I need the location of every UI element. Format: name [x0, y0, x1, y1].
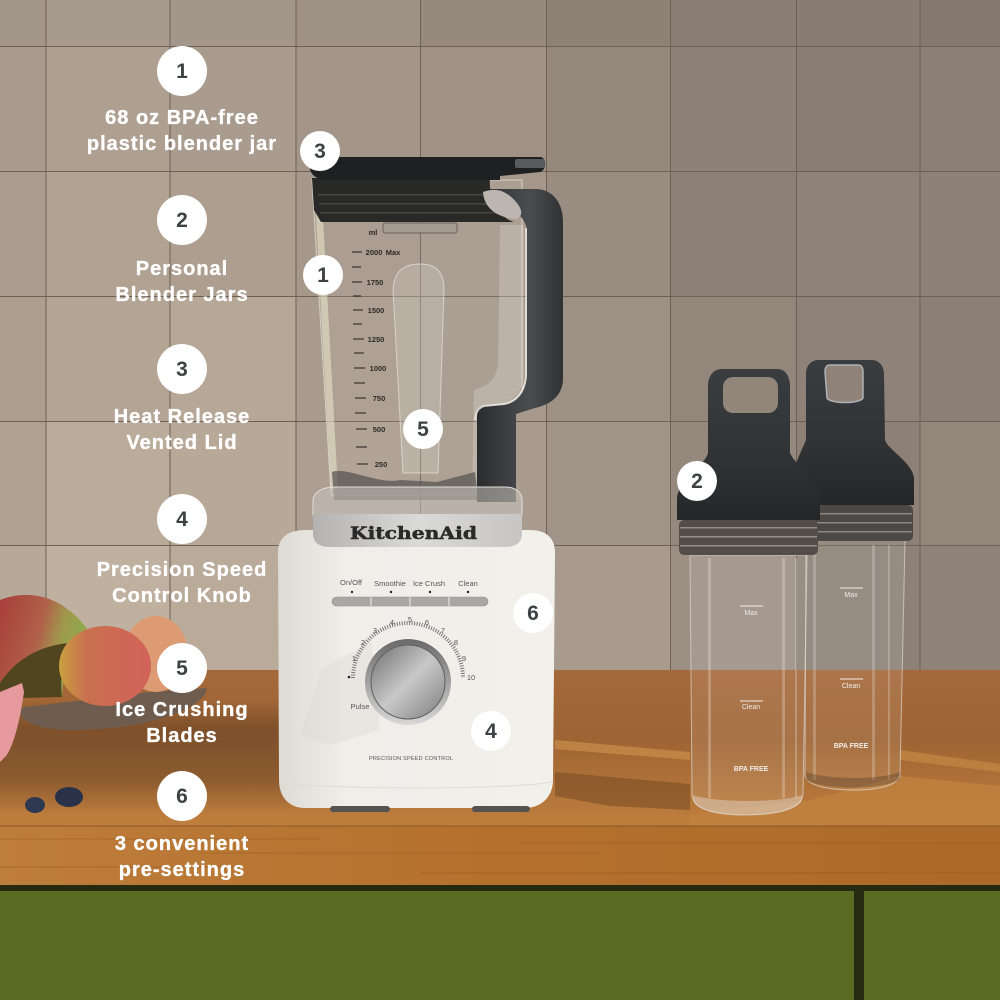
- blueberries: [25, 787, 83, 813]
- preset buttons: Smoothie: [374, 579, 406, 588]
- callout 1: 68 oz jar: plastic blender jar: [87, 133, 277, 155]
- callout 2: personal jars: Blender Jars: [115, 284, 249, 306]
- callout 6: pre-settings: 3 convenient: [115, 833, 249, 855]
- callout 1: 68 oz jar: 68 oz BPA-free: [105, 107, 259, 129]
- fruit plate: [0, 595, 207, 762]
- callout 5: blades: [115, 643, 249, 747]
- jar right inner wall: [472, 225, 524, 495]
- measurement scale: [352, 228, 401, 469]
- measurement scale: 250: [375, 460, 387, 469]
- speed dial: 7: [441, 626, 445, 635]
- personal jar, front: [677, 369, 820, 815]
- cap: [677, 369, 820, 520]
- speed dial: 8: [454, 638, 458, 647]
- callout 5: blades: Blades: [146, 725, 218, 747]
- jar top collar: [312, 178, 514, 222]
- preset buttons: Clean: [458, 579, 478, 588]
- clear tray: [313, 487, 522, 515]
- personal jar, back: Max: [844, 592, 858, 599]
- marker 6 on presets: [513, 593, 553, 633]
- cap: [793, 360, 914, 505]
- marker 3 on lid: 3: [314, 140, 326, 163]
- mango: [0, 595, 88, 697]
- speed dial: [348, 615, 475, 725]
- callout 3: lid: Heat Release: [114, 406, 250, 428]
- marker 6 on presets: 6: [527, 602, 539, 625]
- threaded rings: [679, 520, 818, 555]
- callout 4: knob: Control Knob: [112, 585, 252, 607]
- jar left edge highlight: [314, 182, 338, 490]
- personal jar, front: BPA FREE: [734, 766, 769, 773]
- callout 6: pre-settings: [115, 771, 249, 881]
- precision speed control text: PRECISION SPEED CONTROL: [369, 756, 453, 762]
- measurement scale: 500: [373, 425, 385, 434]
- green cabinets: [0, 885, 1000, 1000]
- jar blade zone: [332, 471, 478, 500]
- speed dial: 1: [352, 654, 356, 663]
- speed dial: 5: [408, 615, 412, 624]
- measurement scale: 2000: [366, 248, 382, 257]
- callout 3: lid: Vented Lid: [126, 432, 238, 454]
- handle lens: [483, 190, 521, 219]
- jar inner center column: [393, 264, 444, 473]
- plate: [17, 688, 207, 730]
- speed dial: 9: [462, 654, 466, 663]
- base feet: [330, 806, 390, 812]
- speed dial: 6: [425, 618, 429, 627]
- speed dial: Pulse: [351, 702, 369, 711]
- personal jar, front: Max: [744, 610, 758, 617]
- marker 1 on jar: 1: [317, 264, 329, 287]
- callout 2: personal jars: 2: [176, 209, 188, 232]
- marker 3 on lid: [300, 131, 340, 171]
- jar body: [312, 180, 522, 495]
- measurement scale: ml: [369, 228, 377, 237]
- base lower lip: [281, 782, 552, 788]
- measurement scale: 1000: [370, 364, 386, 373]
- callout 4: knob: 4: [176, 508, 188, 531]
- measurement scale: 1750: [367, 278, 383, 287]
- marker 4 on knob: 4: [485, 720, 497, 743]
- mango shadow side: [0, 643, 70, 698]
- marker 2 on personal jar: [677, 461, 717, 501]
- back peach: [124, 616, 188, 692]
- speed dial: 2: [361, 638, 365, 647]
- tiled wall background: [0, 0, 1000, 672]
- callout 3: lid: [114, 344, 250, 454]
- preset buttons: On/Off: [340, 578, 363, 587]
- measurement scale: 1250: [368, 335, 384, 344]
- callout 4: knob: Precision Speed: [97, 559, 267, 581]
- handle inner highlight: [475, 228, 526, 420]
- marker 2 on personal jar: 2: [691, 470, 703, 493]
- callout 1: 68 oz jar: 1: [176, 60, 188, 83]
- blender: [278, 157, 563, 812]
- callout 5: blades: 5: [176, 657, 188, 680]
- cap handle opening: [825, 365, 863, 402]
- measurement scale: 750: [373, 394, 385, 403]
- marker 5 on blades: 5: [417, 418, 429, 441]
- pink bowl: [0, 683, 24, 762]
- callout 2: personal jars: [115, 195, 249, 306]
- threaded rings: [800, 505, 913, 541]
- front peach: [59, 626, 151, 706]
- marker 4 on knob: [471, 711, 511, 751]
- jar lid: [310, 157, 545, 180]
- measurement scale: 1500: [368, 306, 384, 315]
- callout 2: personal jars: Personal: [136, 258, 228, 280]
- callout 4: knob: [97, 494, 267, 607]
- callout 3: lid: 3: [176, 358, 188, 381]
- personal jar, back: [793, 360, 914, 790]
- white base: [278, 530, 555, 808]
- callout 1: 68 oz jar: [87, 46, 277, 155]
- jar handle: [477, 189, 563, 502]
- KitchenAid logo: KitchenAid: [350, 524, 477, 544]
- callout 6: pre-settings: pre-settings: [119, 859, 245, 881]
- knob cast shadow: [300, 642, 380, 745]
- speed dial: 10: [467, 673, 475, 682]
- callout 5: blades: Ice Crushing: [115, 699, 249, 721]
- personal jar, back: Clean: [842, 683, 860, 690]
- tumbler: [805, 540, 905, 790]
- cap handle opening: [723, 377, 778, 413]
- tumbler: [690, 555, 807, 815]
- callout 6: pre-settings: 6: [176, 785, 188, 808]
- steel collar: [313, 514, 522, 547]
- speed dial: 4: [390, 618, 394, 627]
- measurement scale: Max: [386, 248, 401, 257]
- preset buttons: [332, 578, 488, 606]
- marker 1 on jar: [303, 255, 343, 295]
- wooden countertop: [0, 670, 1000, 886]
- preset buttons: Ice Crush: [413, 579, 445, 588]
- marker 5 on blades: [403, 409, 443, 449]
- personal jar, front: Clean: [742, 704, 760, 711]
- personal jar, back: BPA FREE: [834, 743, 869, 750]
- speed dial: 3: [373, 626, 377, 635]
- small lid plug: [383, 223, 457, 233]
